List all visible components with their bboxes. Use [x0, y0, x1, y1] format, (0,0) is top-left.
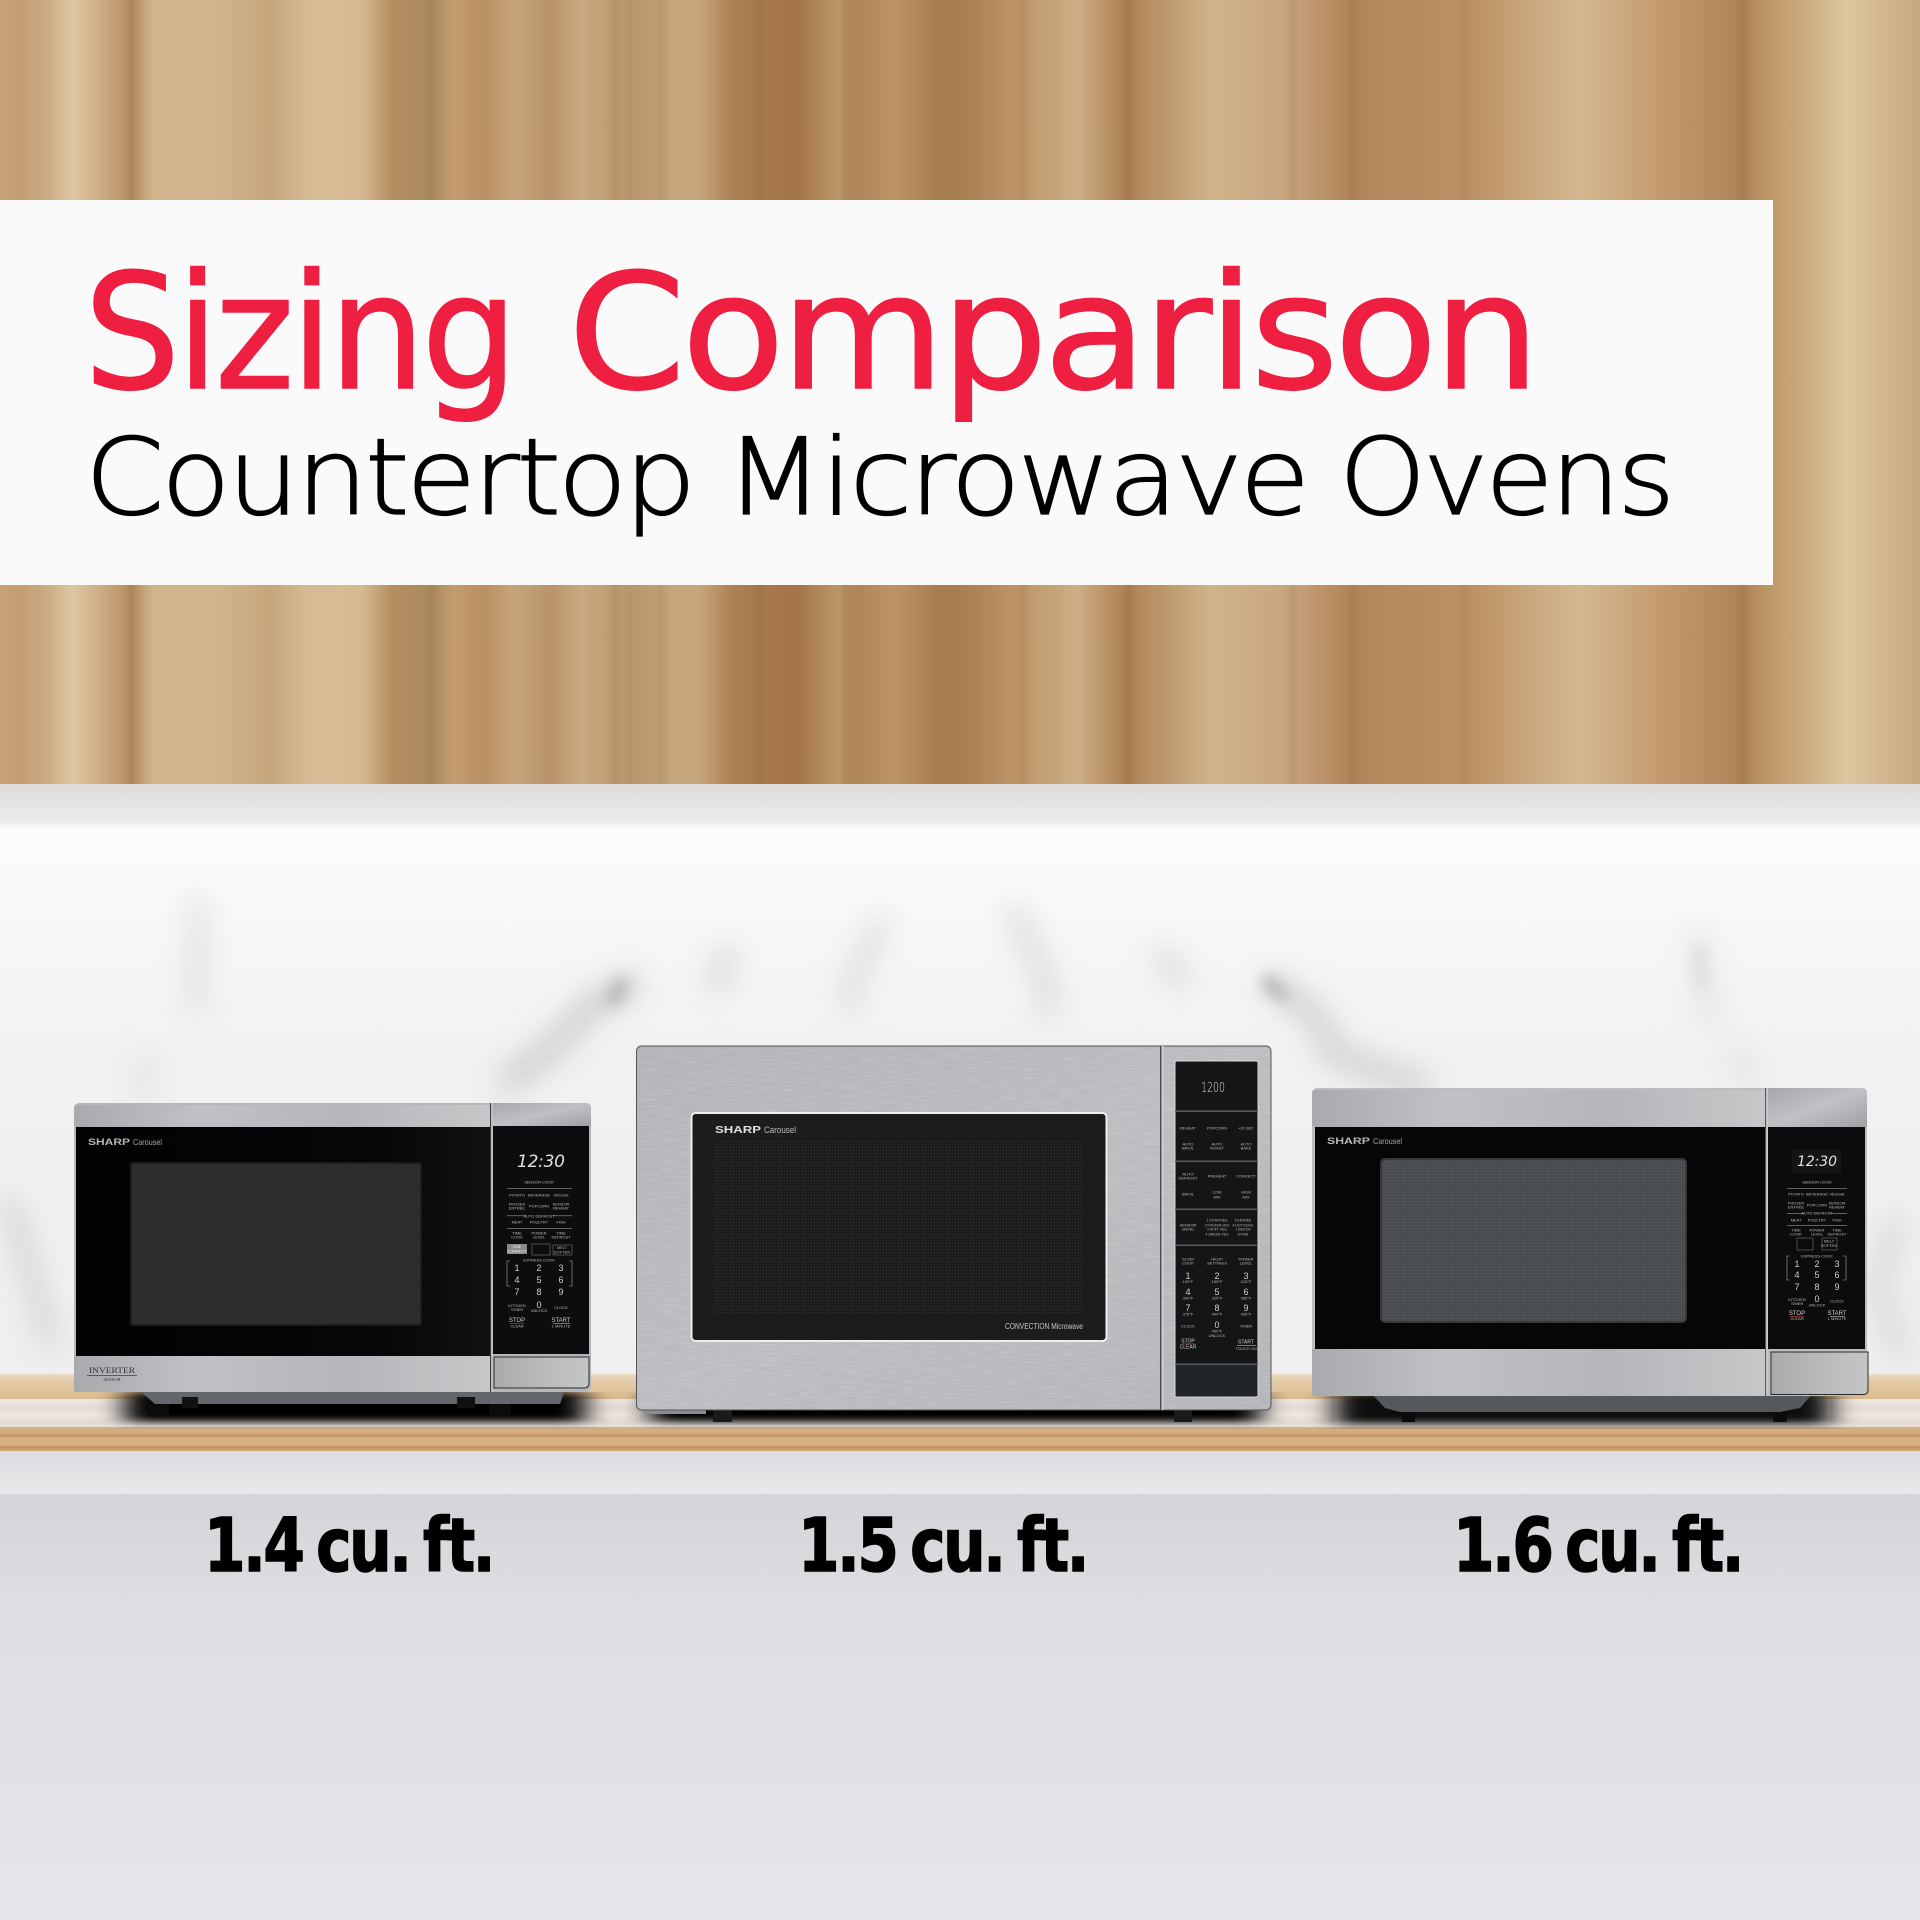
- window: [131, 1163, 421, 1325]
- control panel: COOK: [1790, 1232, 1802, 1236]
- convection label: CONVECTION Microwave: [1005, 1321, 1083, 1331]
- control panel: START: [551, 1318, 571, 1324]
- control panel: TIMER: [1791, 1301, 1803, 1306]
- control panel: 5: [536, 1275, 542, 1285]
- logo: Carousel: [1373, 1136, 1402, 1146]
- control panel: BAKE: [1241, 1146, 1252, 1150]
- control panel: POTATO: [1788, 1192, 1804, 1196]
- cabinet front: [0, 1494, 1920, 1920]
- control panel: TIME: [512, 1230, 522, 1236]
- control panel: 8 FISH: [1238, 1232, 1249, 1236]
- drawer panel: [494, 1357, 589, 1388]
- control panel: 1 MINUTE: [1828, 1316, 1847, 1321]
- mesh: [715, 1140, 1083, 1314]
- control panel: 215°F: [1241, 1279, 1252, 1284]
- logo: SHARP: [88, 1137, 131, 1148]
- control panel: 3: [1243, 1271, 1249, 1281]
- control panel: AUTO: [1211, 1142, 1223, 1146]
- control panel: ROAST: [1210, 1146, 1224, 1150]
- control panel: 8: [1214, 1303, 1220, 1313]
- control panel: POULTRY: [530, 1220, 549, 1224]
- control panel: POPCORN: [1807, 1202, 1827, 1208]
- control panel: POPCORN: [1207, 1126, 1227, 1130]
- control panel: MEAT: [1791, 1218, 1802, 1222]
- control panel: MEAT: [512, 1220, 523, 1224]
- control panel: 1: [1794, 1259, 1800, 1269]
- control panel: COOK: [1182, 1260, 1194, 1266]
- clock: 12:30: [517, 1152, 565, 1172]
- control panel: SOFTEN: [554, 1250, 570, 1254]
- countertop shadows: [125, 1392, 1830, 1424]
- control panel: 5: [1814, 1270, 1820, 1280]
- control panel: CLOCK: [1830, 1298, 1844, 1304]
- control panel: [1175, 1061, 1258, 1397]
- control panel: PREHEAT: [1208, 1174, 1227, 1178]
- control panel: MELT: [557, 1245, 568, 1250]
- clock: 1200: [1201, 1081, 1225, 1096]
- control panel: POPCORN: [529, 1204, 549, 1208]
- control panel: CONNECT: [507, 1248, 527, 1254]
- logo: [715, 1124, 796, 1136]
- control panel: TIME: [1832, 1228, 1842, 1232]
- control panel: SETTINGS: [1207, 1260, 1227, 1266]
- control panel: SENSOR: [1829, 1200, 1846, 1206]
- door split: [1160, 1046, 1164, 1410]
- control panel: 7: [1794, 1282, 1800, 1292]
- bottom band: [74, 1356, 490, 1392]
- heading: Sizing Comparison: [84, 239, 1536, 426]
- control panel: BEVERAGE: [1806, 1192, 1828, 1196]
- feet: [644, 1408, 1192, 1422]
- inverter badge: SENSOR: [103, 1377, 121, 1382]
- drawer panel: [1771, 1352, 1868, 1394]
- control panel: 6 HOT DOGS: [1233, 1224, 1254, 1228]
- control panel: 150°F: [1212, 1279, 1223, 1284]
- control panel: POWER: [1809, 1228, 1825, 1232]
- control panel: CLEAR: [510, 1324, 524, 1328]
- microwave: 1.4 cu. ft.: [74, 1103, 591, 1416]
- control panel: HELP/: [1211, 1256, 1224, 1262]
- control panel: +30 SEC: [1238, 1126, 1254, 1130]
- control panel: SLOW: [1182, 1256, 1194, 1262]
- control panel: 2: [536, 1263, 542, 1273]
- control panel: 8: [536, 1287, 542, 1297]
- subheading: Countertop Microwave Ovens: Microwave: [725, 416, 1307, 539]
- body: [636, 1046, 1271, 1410]
- control panel: POWER: [531, 1230, 547, 1236]
- control panel: TIME: [1791, 1228, 1801, 1232]
- control panel: BROIL: [1182, 1192, 1195, 1196]
- control panel: 7 BACON: [1236, 1228, 1251, 1232]
- control panel: TOUCH ON: [1235, 1346, 1257, 1351]
- title banner: [0, 200, 1773, 585]
- control panel: UNLOCK: [531, 1308, 548, 1313]
- control panel: CLOCK: [554, 1305, 568, 1310]
- control panel: FROZEN: [509, 1202, 525, 1206]
- control panel: 0: [1814, 1294, 1820, 1304]
- control panel: 325°F: [1212, 1296, 1223, 1300]
- control top: [493, 1103, 591, 1126]
- control panel: UNLOCK: [1209, 1333, 1226, 1338]
- window: [1381, 1159, 1686, 1322]
- control panel: TIME: [556, 1230, 566, 1236]
- control panel: STOP: [509, 1318, 525, 1324]
- control panel: CLOCK: [1181, 1324, 1195, 1328]
- control panel: 2: [1214, 1271, 1220, 1281]
- control panel: 9: [558, 1287, 564, 1297]
- control panel: SENSOR: [1180, 1222, 1197, 1228]
- control panel: VEGGIE: [1829, 1192, 1845, 1196]
- control panel: 4: [1185, 1287, 1191, 1297]
- control panel: 2: [1814, 1259, 1820, 1269]
- control panel: 350°F: [1241, 1296, 1252, 1300]
- control panel: 9: [1243, 1303, 1249, 1313]
- base and feet: [1372, 1394, 1812, 1422]
- control panel: ONE: [513, 1244, 522, 1249]
- background: marble backsplash: [0, 784, 1920, 1404]
- background: wood wall panels: [0, 0, 1920, 786]
- control panel: COOK: [511, 1234, 523, 1240]
- base and feet: [139, 1390, 565, 1416]
- label: 1.5 cu. ft.: 1.5 cu. ft.: [798, 1503, 1087, 1589]
- heading: Sizing Comparison: Sizing: [84, 239, 514, 426]
- control panel: POTATO: [509, 1192, 525, 1198]
- control panel: [493, 1126, 589, 1354]
- subheading: Countertop Microwave Ovens: [85, 416, 1672, 539]
- control panel: LEVEL: [533, 1234, 546, 1240]
- inverter badge: INVERTER: [89, 1365, 135, 1375]
- door: [76, 1127, 490, 1356]
- control panel: 0: [536, 1300, 542, 1310]
- subheading: Countertop Microwave Ovens: Ovens: [1339, 416, 1672, 539]
- control panel: VEGGIE: [553, 1192, 569, 1198]
- control panel: REHEAT: [1829, 1204, 1846, 1210]
- control panel: STOP: [1789, 1311, 1805, 1317]
- control panel: 7: [514, 1287, 520, 1297]
- control panel: LOW: [1212, 1190, 1222, 1194]
- control panel: FROZEN: [1788, 1200, 1804, 1206]
- control panel: DEFROST: [551, 1234, 571, 1240]
- control panel: 1: [514, 1263, 520, 1273]
- control panel: MENU: [1182, 1226, 1194, 1232]
- body: [1312, 1088, 1867, 1396]
- label: 1.6 cu. ft.: 1.6 cu. ft.: [1453, 1503, 1742, 1589]
- control panel: CLEAR: [1180, 1344, 1197, 1350]
- control panel: ENTRÉE: [1788, 1204, 1804, 1210]
- control panel: MIX: [1213, 1194, 1221, 1200]
- control panel: 450°F: [1212, 1328, 1223, 1334]
- control panel: POULTRY: [1808, 1218, 1827, 1222]
- logo: [1327, 1136, 1402, 1147]
- control panel: 4: [1794, 1270, 1800, 1280]
- control panel: KITCHEN: [508, 1303, 526, 1308]
- logo: [88, 1137, 162, 1148]
- control panel: 5: [1214, 1287, 1220, 1297]
- control panel: 1 POTATOES: [1207, 1218, 1228, 1222]
- control panel: KITCHEN: [1788, 1297, 1806, 1302]
- door window frame: [692, 1113, 1106, 1341]
- cabinet ledge: [0, 1451, 1920, 1494]
- control panel: TIMER: [1240, 1324, 1252, 1328]
- control panel: 1: [1185, 1271, 1191, 1281]
- control panel: HIGH: [1241, 1190, 1251, 1194]
- microwave: 1.6 cu. ft.: [1312, 1088, 1868, 1422]
- control panel: AUTO: [1182, 1172, 1194, 1176]
- bottom band: [1312, 1349, 1765, 1396]
- logo: SHARP: [715, 1124, 761, 1136]
- control panel: BEVERAGE: [528, 1192, 550, 1198]
- control panel: 7: [1185, 1303, 1191, 1313]
- control panel: SENSOR: [553, 1202, 570, 1206]
- door split: [1765, 1088, 1768, 1396]
- control panel: UNLOCK: [1809, 1302, 1826, 1308]
- logo: Carousel: [764, 1125, 796, 1135]
- logo: SHARP: [1327, 1136, 1371, 1147]
- control panel: CONVECT: [1236, 1174, 1256, 1178]
- countertop: [0, 1374, 1920, 1451]
- control panel: 1 MINUTE: [552, 1324, 571, 1328]
- subheading: Countertop Microwave Ovens: Countertop: [85, 416, 693, 539]
- control panel: 8: [1814, 1282, 1820, 1292]
- control panel: STOP: [1181, 1338, 1195, 1344]
- control panel: POWER: [1238, 1256, 1254, 1262]
- control panel: LEVEL: [1811, 1232, 1824, 1236]
- control panel: 3: [558, 1263, 564, 1273]
- control panel: 3 SOFT VEG: [1207, 1228, 1227, 1232]
- control panel: 400°F: [1212, 1312, 1223, 1316]
- control panel: SENSOR COOK: [1802, 1180, 1832, 1184]
- control panel: AUTO: [1182, 1142, 1194, 1146]
- door: [1315, 1127, 1765, 1349]
- control panel: FISH: [1832, 1218, 1842, 1222]
- control panel: AUTO DEFROST: [1801, 1210, 1833, 1216]
- brushed texture: [638, 1048, 1270, 1409]
- control panel: 4: [514, 1275, 520, 1285]
- heading: Sizing Comparison: Comparison: [568, 239, 1536, 426]
- control panel: SENSOR COOK: [524, 1180, 554, 1184]
- control panel: FISH: [556, 1220, 566, 1224]
- control panel: [1768, 1127, 1865, 1349]
- control panel: BROIL: [1182, 1146, 1195, 1150]
- control panel: 6: [1834, 1270, 1840, 1280]
- control panel: 375°F: [1183, 1312, 1194, 1316]
- control panel: MIX: [1242, 1194, 1250, 1200]
- control panel: LEVEL: [1240, 1260, 1253, 1266]
- control panel: 6: [558, 1275, 564, 1285]
- control panel: EXPRESS COOK: [523, 1258, 555, 1262]
- control panel: 9: [1834, 1282, 1840, 1292]
- clock: 12:30: [1797, 1154, 1837, 1170]
- control panel: REHEAT: [553, 1206, 570, 1210]
- door split: [490, 1103, 493, 1392]
- top band: [74, 1105, 490, 1127]
- control panel: SOFTEN: [1821, 1243, 1837, 1248]
- control panel: 0: [1214, 1320, 1220, 1330]
- logo: Carousel: [133, 1137, 162, 1147]
- control top: [1768, 1088, 1867, 1127]
- body: [74, 1103, 591, 1392]
- control panel: START: [1827, 1311, 1847, 1317]
- control panel: 425°F: [1241, 1312, 1252, 1316]
- microwave: 1.5 cu. ft.: [636, 1046, 1271, 1422]
- control panel: 5 ENTRÉE: [1235, 1218, 1252, 1222]
- control panel: 300°F: [1183, 1296, 1194, 1300]
- control panel: REHEAT: [1180, 1126, 1197, 1130]
- control panel: AUTO DEFROST: [523, 1214, 555, 1218]
- control panel: 2 FROZEN VEG: [1205, 1224, 1230, 1228]
- control panel: START: [1238, 1340, 1254, 1346]
- control panel: DEFROST: [1827, 1232, 1847, 1236]
- control panel: DEFROST: [1178, 1176, 1198, 1180]
- top band: [1312, 1090, 1765, 1127]
- control panel: CLEAR: [1790, 1316, 1804, 1321]
- control panel: 4 GREEN VEG: [1206, 1232, 1229, 1236]
- control panel: EXPRESS COOK: [1801, 1254, 1833, 1258]
- control panel: MELT: [1824, 1238, 1835, 1244]
- control panel: 100°F: [1183, 1279, 1194, 1284]
- control panel: 3: [1834, 1259, 1840, 1269]
- control panel: TIMER: [511, 1307, 523, 1312]
- control panel: 6: [1243, 1287, 1249, 1297]
- control panel: AUTO: [1240, 1142, 1252, 1146]
- control panel: ENTRÉE: [509, 1206, 525, 1210]
- inverter badge: [87, 1365, 137, 1382]
- label: 1.4 cu. ft.: 1.4 cu. ft.: [204, 1503, 493, 1589]
